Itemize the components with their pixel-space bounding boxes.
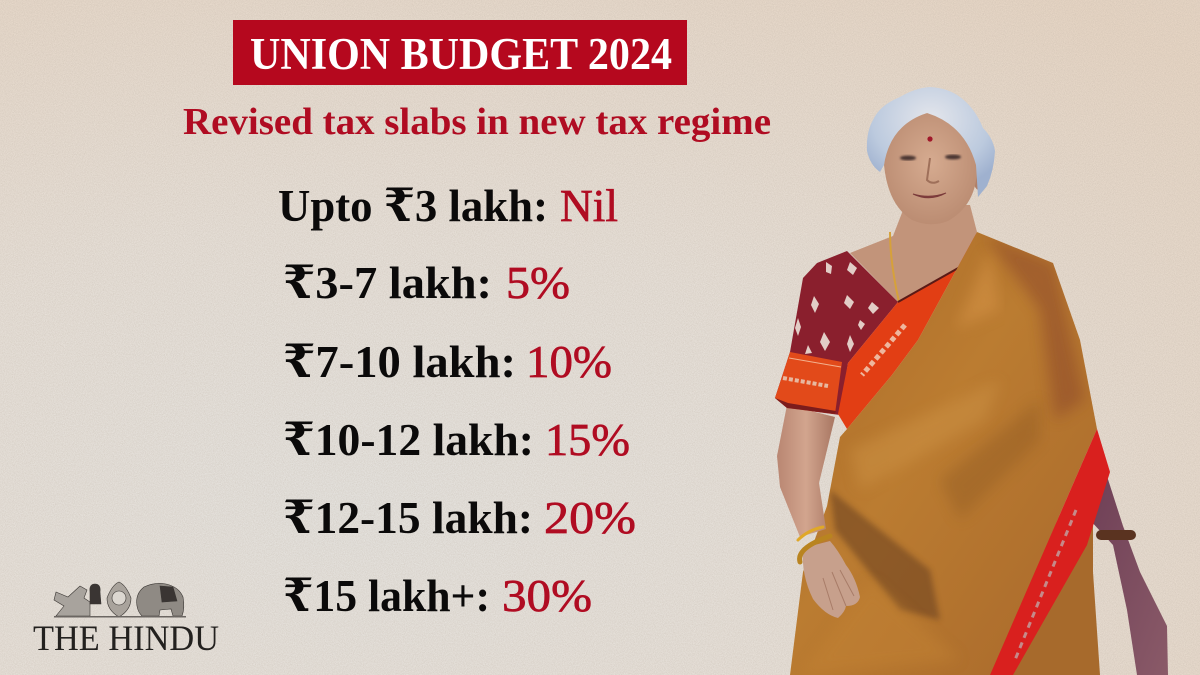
title banner: UNION BUDGET 2024 <box>250 29 672 79</box>
slab: up to 3 lakh: Upto ₹3 lakh: <box>278 180 548 231</box>
logo: The Hindu <box>33 582 219 658</box>
necklace <box>890 232 899 302</box>
eyes <box>900 155 961 160</box>
saree chest border <box>838 232 977 429</box>
slab: above 15 lakh: 30% <box>502 570 592 621</box>
slab: 12-15 lakh: ₹12-15 lakh: <box>283 492 533 543</box>
ear and face <box>884 112 985 224</box>
bracelet <box>1096 530 1136 540</box>
smile <box>913 193 946 198</box>
neck and chest <box>850 205 977 302</box>
slab: 12-15 lakh: 20% <box>544 492 636 543</box>
icon: masthead emblem <box>54 582 186 618</box>
silver hair <box>867 87 995 197</box>
right arm <box>1090 470 1168 675</box>
left hand <box>803 541 860 618</box>
nose <box>927 158 939 183</box>
slab: 7-10 lakh <box>283 336 612 387</box>
left arm <box>777 405 835 537</box>
saree red border stripe <box>990 429 1110 675</box>
saree drape <box>790 232 1097 675</box>
skirt panel <box>1005 522 1100 675</box>
slab: 3-7 lakh: 5% <box>506 257 570 308</box>
wordmark: THE HINDU <box>33 618 219 658</box>
bindi <box>927 136 933 142</box>
slab: above 15 lakh: ₹15 lakh+: <box>283 570 490 621</box>
slab: 10-12 lakh: ₹10-12 lakh: <box>283 414 534 465</box>
bangles <box>798 527 830 562</box>
illustration: woman in saree <box>775 87 1168 675</box>
slab: up to 3 lakh: Nil <box>560 180 618 231</box>
sleeve band <box>775 352 842 414</box>
subtitle: Revised tax slabs in new tax regime <box>183 101 771 143</box>
slab: 3-7 lakh: ₹3-7 lakh: <box>283 257 492 308</box>
slab: 10-12 lakh: 15% <box>545 414 630 465</box>
slab: 7-10 lakh: ₹7-10 lakh: <box>283 336 516 387</box>
tax slab list <box>278 180 636 621</box>
blouse <box>775 251 898 415</box>
slab: 7-10 lakh: 10% <box>526 336 612 387</box>
